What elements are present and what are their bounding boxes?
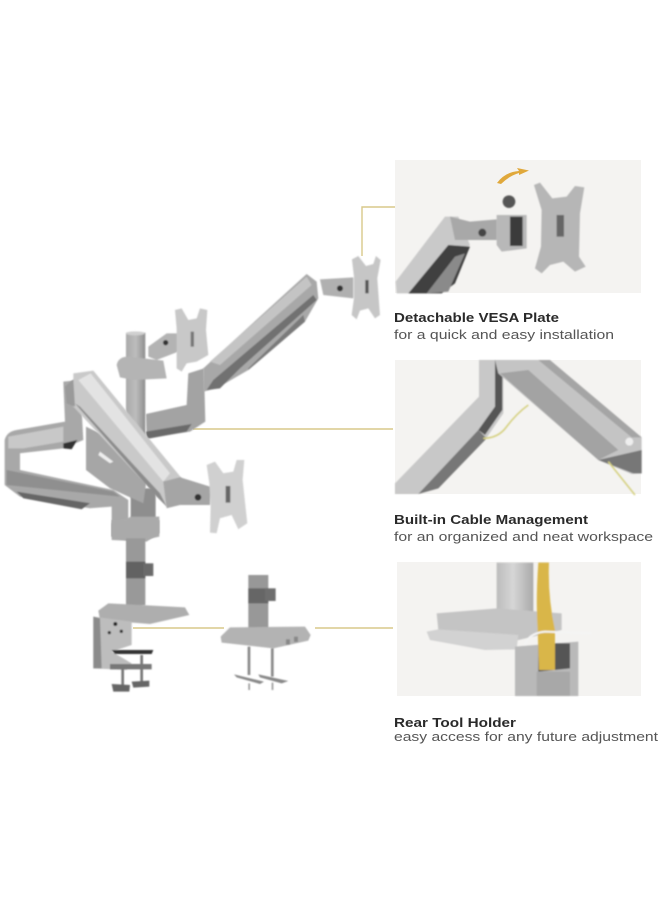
caption: Detachable VESA Plate: Detachable VESA Plate: [394, 310, 559, 325]
monitor arm: main product: [5, 256, 381, 692]
rear L arm: [146, 368, 205, 439]
icon: orange arrow: [497, 168, 529, 184]
caption: Built-in Cable Management: [394, 512, 653, 544]
caption: Detachable VESA Plate: for a quick and easy installation: [394, 327, 614, 342]
panel: Built-in Cable Management: [395, 360, 642, 495]
caption: Rear Tool Holder: easy access for any future adjustment: [394, 729, 658, 744]
detail image: tool holder: [427, 563, 592, 696]
middle VESA plate: [175, 308, 208, 372]
detached clamp base: [221, 575, 311, 690]
panel: Rear Tool Holder: [397, 562, 641, 696]
upper gas spring arm: [203, 274, 318, 392]
caption: Rear Tool Holder: [394, 715, 658, 744]
lower pole and clamp: [93, 520, 189, 692]
lower gas spring arm: [65, 371, 182, 507]
detail image: VESA plate: [396, 183, 586, 293]
lower pole segment: [131, 488, 156, 522]
caption: Built-in Cable Management: for an organized and neat workspace: [394, 529, 653, 544]
panel: Detachable VESA Plate: [395, 160, 641, 293]
lower mount and VESA plate: [163, 460, 247, 533]
upper pole: [117, 331, 178, 436]
caption: Rear Tool Holder: Rear Tool Holder: [394, 715, 516, 730]
lower left arms: [5, 380, 147, 537]
detail image: cable arm: [395, 360, 642, 495]
collar: [112, 517, 159, 542]
upper right mount and VESA plate: [320, 256, 381, 319]
caption: Built-in Cable Management: Built-in Cable Management: [394, 512, 589, 527]
caption: Detachable VESA Plate: [394, 310, 614, 342]
connector lines: [133, 207, 395, 628]
